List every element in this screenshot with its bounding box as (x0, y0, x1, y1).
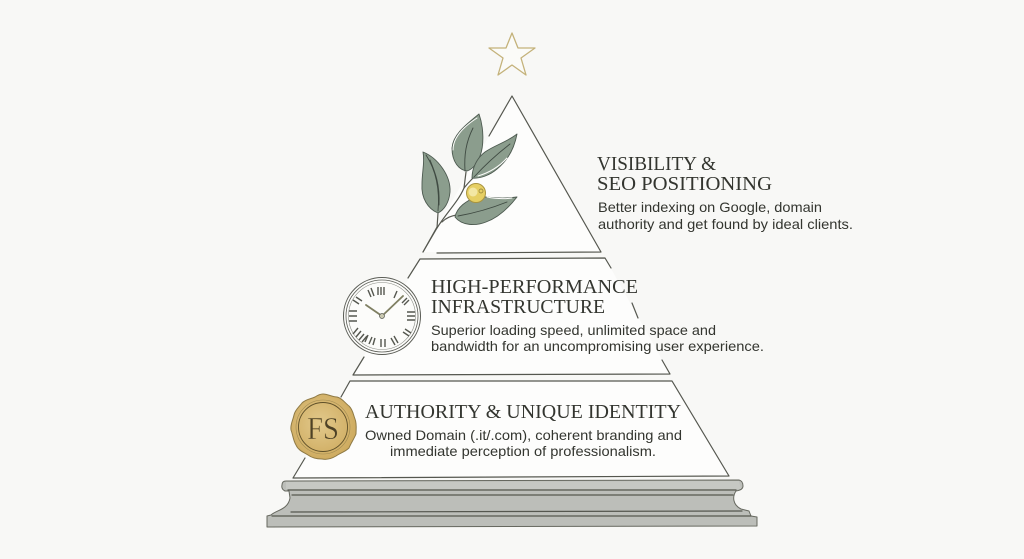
heading: infrastructure (431, 276, 638, 318)
body: authority: Owned Domain (.it/.com), coherent branding and (365, 427, 682, 443)
icon: gold wax seal FS: FS (307, 410, 339, 446)
icon: olive branch (422, 114, 517, 252)
olive fruit (466, 184, 486, 202)
heading: infrastructure: INFRASTRUCTURE (431, 296, 605, 318)
body: infrastructure (431, 322, 764, 354)
leaf: right (472, 134, 517, 178)
text: authority and unique identity (365, 401, 682, 459)
leaf: left (422, 152, 450, 213)
icon: gold star (489, 33, 535, 75)
pyramid tier: top triangle (423, 96, 601, 253)
body: visibility: authority and get found by ideal clients. (598, 216, 853, 232)
body: visibility (598, 199, 853, 232)
heading: visibility (597, 153, 772, 195)
clock numerals (349, 287, 415, 347)
pyramid tier: bottom (293, 381, 729, 478)
body: infrastructure: Superior loading speed, unlimited space and (431, 322, 716, 338)
body: infrastructure: bandwidth for an uncompromising user experience. (431, 338, 764, 354)
text: high-performance infrastructure (431, 276, 764, 354)
heading: visibility: SEO POSITIONING (597, 173, 772, 195)
icon: roman numeral clock (344, 278, 420, 354)
heading: visibility: VISIBILITY & (597, 153, 716, 175)
icon: gold wax seal FS (291, 394, 356, 459)
pyramid tier: middle (353, 258, 670, 375)
clock hands (366, 296, 403, 316)
stone pedestal (267, 480, 757, 527)
heading: infrastructure: HIGH-PERFORMANCE (431, 276, 638, 298)
body: visibility: Better indexing on Google, domain (598, 199, 822, 215)
text: visibility and SEO positioning (597, 153, 853, 232)
leaf: top (452, 114, 483, 171)
heading: authority: AUTHORITY & UNIQUE IDENTITY (365, 401, 681, 423)
body: authority (365, 427, 682, 459)
body: authority: immediate perception of professionalism. (390, 443, 656, 459)
leaf: lower (455, 196, 517, 225)
